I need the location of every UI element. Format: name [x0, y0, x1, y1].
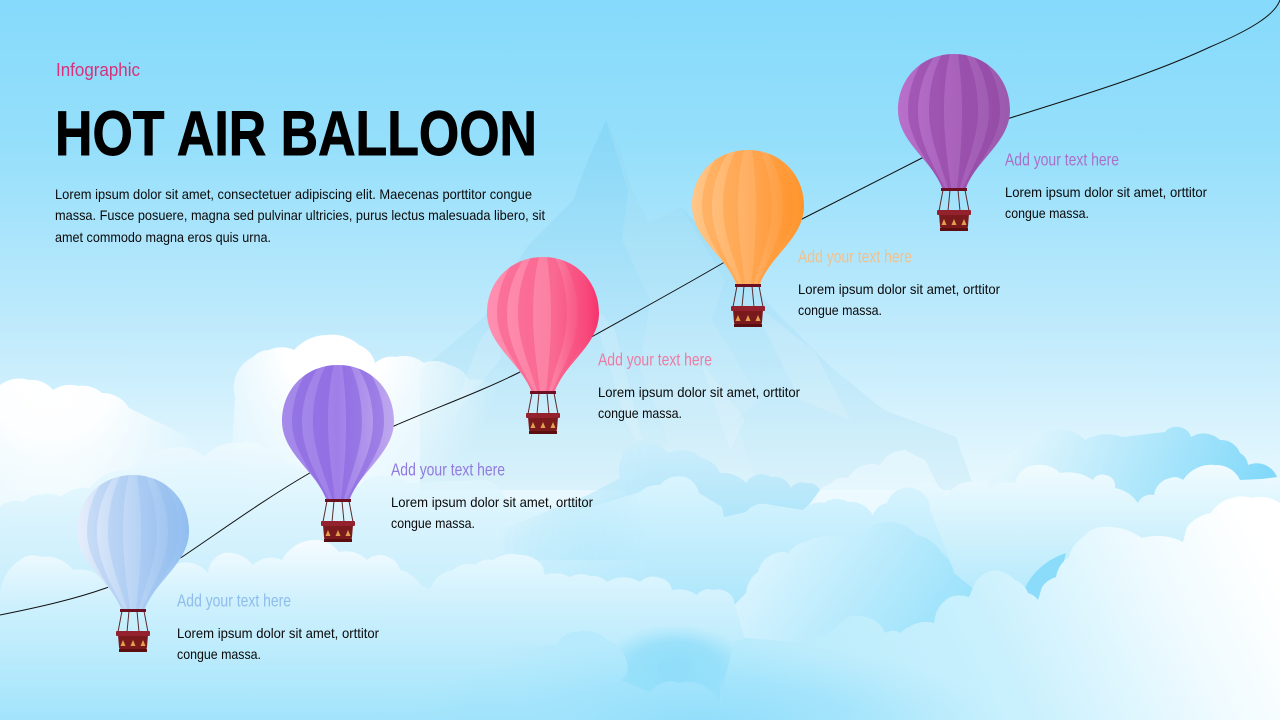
background: blue hollow behind lower lobe [600, 624, 750, 712]
text block: balloon 4: Lorem ipsum dolor sit amet, orttitor [798, 281, 1000, 297]
text block: balloon 5: Lorem ipsum dolor sit amet, orttitor [1005, 184, 1207, 200]
title: HOT AIR BALLOON [55, 99, 537, 169]
balloon 2: violet [282, 365, 394, 542]
text block: balloon 2: congue massa. [391, 515, 475, 531]
balloon 4: orange [692, 150, 804, 327]
text block: balloon 3: Add your text here [598, 350, 712, 370]
background: blue gap [1020, 553, 1066, 615]
text block: balloon 4: Add your text here [798, 246, 912, 266]
intro paragraph: Lorem ipsum dolor sit amet, consectetuer adipiscing elit. Maecenas porttitor congue [55, 186, 532, 202]
background: bright patch [800, 450, 945, 540]
text block: balloon 5 [1005, 150, 1207, 221]
background: right blue cloud [988, 427, 1277, 540]
background: central white dome cloud [232, 335, 540, 520]
text block: balloon 2 [391, 460, 593, 531]
intro paragraph: massa. Fusce posuere, magna sed pulvinar ultricies, purus lectus malesuada libero, sit [55, 207, 545, 223]
text block: balloon 3: Lorem ipsum dolor sit amet, orttitor [598, 384, 800, 400]
text block: balloon 5: Add your text here [1005, 150, 1119, 170]
text block: balloon 2: Add your text here [391, 460, 505, 480]
background: lower left cloud bank [0, 540, 480, 720]
kicker: Infographic: Infographic [56, 59, 140, 80]
background: second cloud bank [0, 442, 640, 600]
balloon 5: purple [898, 54, 1010, 231]
background: faded mountain [420, 120, 975, 490]
background: lower bump cloud [480, 631, 725, 720]
background: foreground centre cloud [720, 522, 985, 700]
text block: balloon 4: congue massa. [798, 302, 882, 318]
background: bottom blue glow [400, 640, 1000, 720]
text block: balloon 4 [798, 246, 1000, 318]
background: left white cloud [0, 379, 210, 530]
text block: balloon 1: Add your text here [177, 590, 291, 610]
background: front right white cloud [720, 496, 1280, 720]
background: centre blue bumps [500, 440, 820, 560]
intro paragraph [55, 186, 545, 245]
text block: balloon 2: Lorem ipsum dolor sit amet, orttitor [391, 494, 593, 510]
balloon 3: pink [487, 257, 599, 434]
text block: balloon 5: congue massa. [1005, 205, 1089, 221]
background: right pale cloud [880, 465, 1280, 640]
text block: balloon 1: Lorem ipsum dolor sit amet, orttitor [177, 625, 379, 641]
text block: balloon 1: congue massa. [177, 646, 261, 662]
balloon 1: blue [77, 475, 189, 652]
background: centre mid cloud [556, 476, 948, 700]
text block: balloon 3: congue massa. [598, 405, 682, 421]
text block: balloon 1 [177, 590, 379, 662]
background: centre lower cloud [380, 554, 745, 720]
intro paragraph: amet commodo magna eros quis urna. [55, 229, 271, 245]
text block: balloon 3 [598, 350, 800, 421]
